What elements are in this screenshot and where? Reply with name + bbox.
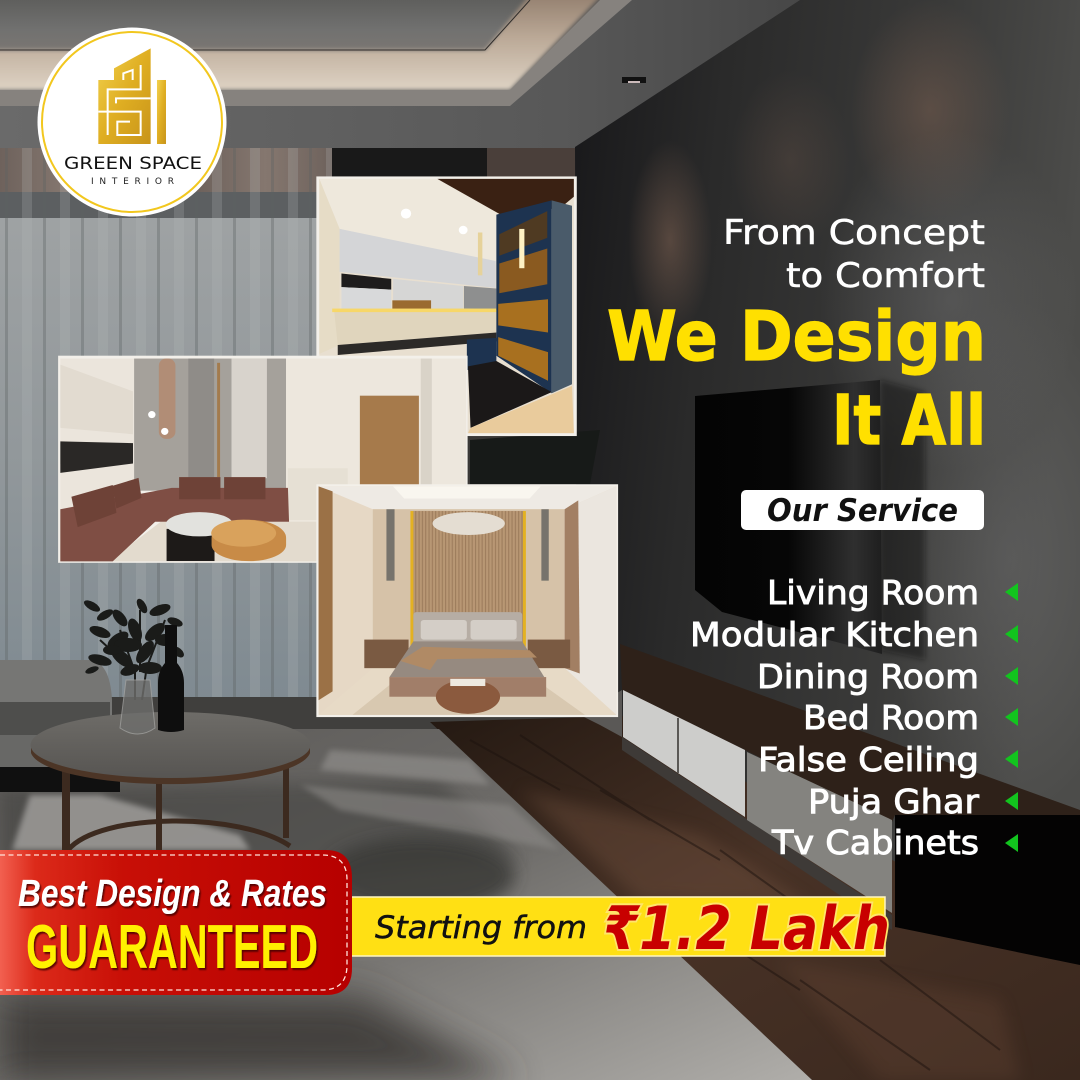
logo icon: gold building monogram bbox=[98, 48, 166, 144]
headline: to Comfort bbox=[786, 256, 985, 296]
green arrow markers bbox=[1005, 583, 1018, 852]
left furniture: sofa, table and plant bbox=[0, 597, 310, 850]
service list: Living Room bbox=[767, 573, 979, 612]
service list: Puja Ghar bbox=[808, 782, 979, 821]
red guarantee badge: GUARANTEED bbox=[26, 913, 318, 982]
photo: kitchen bbox=[316, 176, 577, 436]
service list: Dining Room bbox=[757, 657, 979, 696]
headline: It All bbox=[832, 381, 986, 461]
service list: Tv Cabinets bbox=[771, 823, 979, 862]
service list bbox=[690, 573, 979, 862]
price banner: Starting from bbox=[375, 910, 587, 946]
icon: plant leaves bbox=[82, 597, 186, 700]
logo badge bbox=[38, 28, 226, 216]
red guarantee badge bbox=[0, 850, 352, 995]
icon: glass vase bbox=[120, 680, 155, 734]
red guarantee badge: Best Design & Rates bbox=[18, 873, 327, 915]
service list: Modular Kitchen bbox=[690, 615, 979, 654]
logo badge: GREEN SPACE bbox=[64, 154, 202, 174]
headline: From Concept bbox=[723, 213, 985, 253]
price banner: ₹1.2 Lakh bbox=[603, 894, 890, 964]
logo badge: INTERIOR bbox=[91, 177, 174, 187]
television on wall bbox=[695, 380, 925, 660]
photo: bedroom bbox=[316, 484, 618, 717]
headline: We Design bbox=[607, 297, 986, 377]
our service label: Our Service bbox=[767, 493, 958, 529]
photo: living room bbox=[58, 356, 468, 563]
headline bbox=[607, 213, 986, 461]
icon: black bottle bbox=[158, 625, 184, 732]
price banner bbox=[345, 894, 890, 964]
service list: Bed Room bbox=[803, 698, 979, 737]
service list: False Ceiling bbox=[758, 740, 979, 779]
